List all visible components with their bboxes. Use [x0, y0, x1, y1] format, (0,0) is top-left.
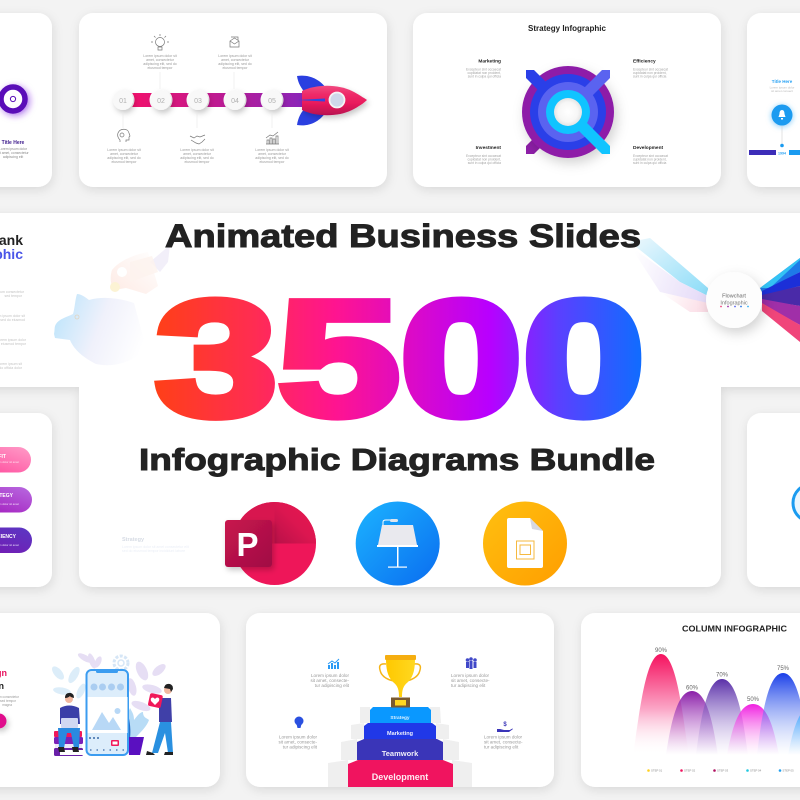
icon: keynote	[356, 502, 440, 586]
text: description	[0, 147, 30, 159]
text: lorem blocks: adipiscing elit, sed do	[255, 156, 289, 160]
text: lorem blocks: adipiscing elit, sed do	[143, 62, 177, 66]
text: faded strategy caption: sed do eiusmod tempor incididunt labore	[122, 549, 185, 553]
text: lorem blocks: eiusmod tempor	[259, 160, 285, 164]
text: top right description: sit amet, consecte-	[451, 678, 490, 683]
text: piggy bank heading	[0, 232, 23, 262]
text: strategy descriptions: sunt in culpa qui officia	[633, 74, 666, 78]
icon: people	[466, 657, 477, 669]
text: bottom right description: Lorem ipsum dolor	[484, 734, 523, 740]
step circles 01 to 05: 02	[157, 98, 165, 105]
piggy bank faded illustration	[54, 252, 158, 365]
text: lorem blocks: Lorem ipsum dolor sit	[255, 148, 289, 152]
labels: percentages	[655, 648, 790, 703]
stair: teamwork	[357, 739, 443, 760]
illustration: phone with photo	[86, 670, 128, 755]
pill: efficiency	[0, 528, 32, 553]
stair: strategy: Strategy	[390, 715, 410, 721]
icon: head	[118, 129, 130, 142]
text: bottom left description: sit amet, consecte-	[278, 740, 317, 744]
text: lorem blocks: amet, consectetur	[146, 58, 175, 62]
panel: trophy stairs	[246, 613, 554, 787]
labels: four strategy items: Investment	[476, 145, 501, 151]
grey side stairs	[328, 707, 472, 787]
stair: marketing: Marketing	[387, 731, 413, 737]
icon: handshake	[190, 135, 205, 144]
text: lorem blocks: amet, consectetur	[183, 152, 212, 156]
heading: animated business slides: Animated Business Slides	[165, 218, 641, 254]
icon: bulb	[294, 716, 304, 728]
button	[0, 714, 6, 728]
timeline bars	[749, 150, 800, 156]
text: lorem blocks: eiusmod tempor	[147, 66, 173, 70]
icon: powerpoint	[225, 502, 316, 585]
text: faded strategy caption	[122, 537, 189, 553]
text: bottom right description: sit amet, consecte-	[484, 740, 523, 744]
icon: purple ring	[1, 87, 25, 111]
text: lorem blocks: Lorem ipsum dolor sit	[107, 148, 141, 152]
text: subtitle	[770, 86, 794, 93]
text: bottom left description: Lorem ipsum dolor	[279, 734, 317, 740]
panel: rocket timeline	[79, 13, 387, 187]
flowchart centre circle: Flowchart	[722, 294, 746, 300]
text: lorem blocks: amet, consectetur	[258, 152, 287, 156]
big number 3500: 3500	[155, 267, 645, 450]
rocket illustration	[297, 76, 367, 125]
text: top left description: sit amet, consecte-	[310, 678, 349, 683]
text: bottom left description: tur adipiscing elit	[283, 744, 318, 750]
stair: marketing	[364, 723, 436, 739]
labels: four strategy items: Marketing	[478, 58, 501, 64]
icon: powerpoint: P	[236, 526, 259, 563]
text: strategy descriptions: cupidatat non proident,	[633, 71, 667, 75]
text: lorem blocks: adipiscing elit, sed do	[180, 156, 214, 160]
labels: percentages: 60%	[686, 686, 699, 692]
pill: profit	[0, 447, 31, 472]
legend: STEP 01	[651, 768, 663, 772]
text: strategy descriptions: cupidatat non proident,	[467, 158, 501, 162]
icon: google slides	[483, 502, 567, 586]
labels: percentages: 75%	[777, 666, 790, 672]
illustration: background leaves and gear	[50, 651, 168, 713]
text: faded strategy caption: Lorem ipsum dolor sit amet consectetur elit	[122, 545, 189, 549]
text: cropped heading	[0, 668, 7, 691]
panel: right partial timeline card	[747, 13, 800, 187]
text: lorem blocks: amet, consectetur	[110, 152, 139, 156]
text: lorem blocks: Lorem ipsum dolor sit	[180, 148, 214, 152]
step circles 01 to 05: 01	[119, 98, 127, 105]
timeline bar	[125, 93, 307, 107]
text: bottom left description	[278, 734, 318, 750]
text: top right description: Lorem ipsum dolor	[451, 673, 490, 678]
timeline bars: 1994	[778, 152, 786, 156]
icon: chart	[328, 659, 339, 669]
text: title here: Title Here	[2, 140, 25, 146]
text: top left description: tur adipiscing elit	[315, 683, 350, 688]
labels: four strategy items: Development	[633, 145, 664, 151]
text: lorem blocks: amet, consectetur	[221, 58, 250, 62]
text: strategy descriptions: Excepteur sint occaecat	[466, 68, 501, 72]
panel: left pills card	[0, 413, 52, 587]
text: bottom right description	[484, 734, 523, 750]
text: faded strategy caption: Strategy	[122, 537, 145, 543]
text: strategy descriptions: sunt in culpa qui officia	[468, 161, 501, 165]
text: lorem blocks: eiusmod tempor	[222, 66, 248, 70]
panel: social illustration card	[0, 613, 220, 787]
labels: four strategy items	[476, 58, 664, 151]
illustration: person holding heart	[146, 684, 173, 755]
text: strategy descriptions: Excepteur sint occaecat	[633, 68, 668, 72]
heading: strategy infographic: Strategy Infographic	[528, 24, 607, 33]
text: strategy descriptions: Excepteur sint occaecat	[466, 154, 501, 158]
stair: teamwork: Teamwork	[382, 749, 419, 758]
legend: STEP 02	[684, 768, 696, 772]
text: lorem blocks: eiusmod tempor	[111, 160, 137, 164]
concentric target diagram	[522, 66, 614, 158]
icon: blue bell circle	[772, 104, 792, 126]
icon: hand with dollar: $	[503, 722, 507, 728]
chart: bell curves	[633, 654, 800, 755]
text: subtitle: Lorem ipsum dolor	[770, 86, 794, 90]
text: lorem blocks	[107, 54, 289, 164]
text: description: adipiscing elit	[3, 155, 23, 159]
text: strategy descriptions: cupidatat non proident,	[467, 71, 501, 75]
legend: STEP 04	[750, 768, 762, 772]
icon: hand with dollar	[497, 722, 513, 732]
labels: percentages: 90%	[655, 648, 668, 654]
panel: strategy infographic	[413, 13, 721, 187]
text: bottom right description: tur adipiscing elit	[484, 744, 519, 750]
flowchart centre circle	[706, 272, 762, 328]
text: cropped description	[0, 695, 20, 707]
icon: chart	[266, 132, 279, 144]
illustration: plant in pot	[127, 708, 149, 755]
heading: column infographic: COLUMN INFOGRAPHIC	[682, 624, 787, 634]
pill: strategy	[0, 487, 32, 512]
icon: envelope	[230, 37, 239, 47]
flowchart right ribbons	[760, 258, 800, 342]
text: cropped description: sed tempor	[0, 699, 17, 703]
text: lorem blocks: adipiscing elit, sed do	[218, 62, 252, 66]
step circles 01 to 05	[112, 88, 284, 112]
labels: percentages: 50%	[747, 697, 760, 703]
flowchart faded left ribbons	[130, 238, 708, 312]
text: piggy bank faded lines	[0, 290, 27, 370]
text: top right description	[451, 673, 490, 688]
text: strategy descriptions	[466, 68, 668, 165]
stair: strategy	[370, 707, 431, 723]
icon: light bulb	[151, 34, 169, 50]
step circles 01 to 05: 03	[194, 98, 202, 105]
text: top right description: tur adipiscing elit	[451, 683, 486, 688]
timeline marker	[780, 144, 784, 147]
labels: four strategy items: Efficiency	[633, 58, 656, 64]
icon: trophy	[380, 655, 420, 708]
text: strategy descriptions: sunt in culpa qui officia	[633, 161, 666, 165]
legend: STEP 03	[717, 768, 729, 772]
text: lorem blocks: adipiscing elit, sed do	[107, 156, 141, 160]
illustration: person sitting on books	[54, 693, 83, 756]
panel: left partial card with purple ring	[0, 13, 52, 187]
stair: development	[348, 760, 453, 787]
legend	[647, 768, 794, 772]
flowchart centre circle: Infographic	[720, 300, 748, 306]
text: lorem blocks: Lorem ipsum dolor sit	[143, 54, 177, 58]
text: strategy descriptions: cupidatat non proident,	[633, 158, 667, 162]
text: cropped description: magna	[2, 703, 12, 707]
text: subtitle: sit amet consect	[771, 89, 793, 93]
panel: central hero card	[0, 213, 800, 587]
text: piggy bank faded lines: sed tempor	[4, 294, 23, 298]
text: title here: Title Here	[772, 79, 793, 84]
text: strategy descriptions: sunt in culpa qui officia	[468, 74, 501, 78]
text: top left description	[310, 673, 350, 688]
step circles 01 to 05: 04	[231, 98, 239, 105]
text: lorem blocks: Lorem ipsum dolor sit	[218, 54, 252, 58]
heading: infographic diagrams bundle: Infographic Diagrams Bundle	[139, 442, 655, 477]
legend: STEP 05	[782, 768, 794, 772]
step circles 01 to 05: 05	[268, 98, 276, 105]
text: strategy descriptions: Excepteur sint occaecat	[633, 154, 668, 158]
icon: blue ring	[793, 484, 800, 522]
panel: right partial ring card	[747, 413, 800, 587]
text: lorem blocks: eiusmod tempor	[184, 160, 210, 164]
stair: development: Development	[372, 772, 428, 782]
panel: column infographic	[581, 613, 800, 787]
text: top left description: Lorem ipsum dolor	[311, 673, 349, 678]
labels: percentages: 70%	[716, 672, 729, 678]
